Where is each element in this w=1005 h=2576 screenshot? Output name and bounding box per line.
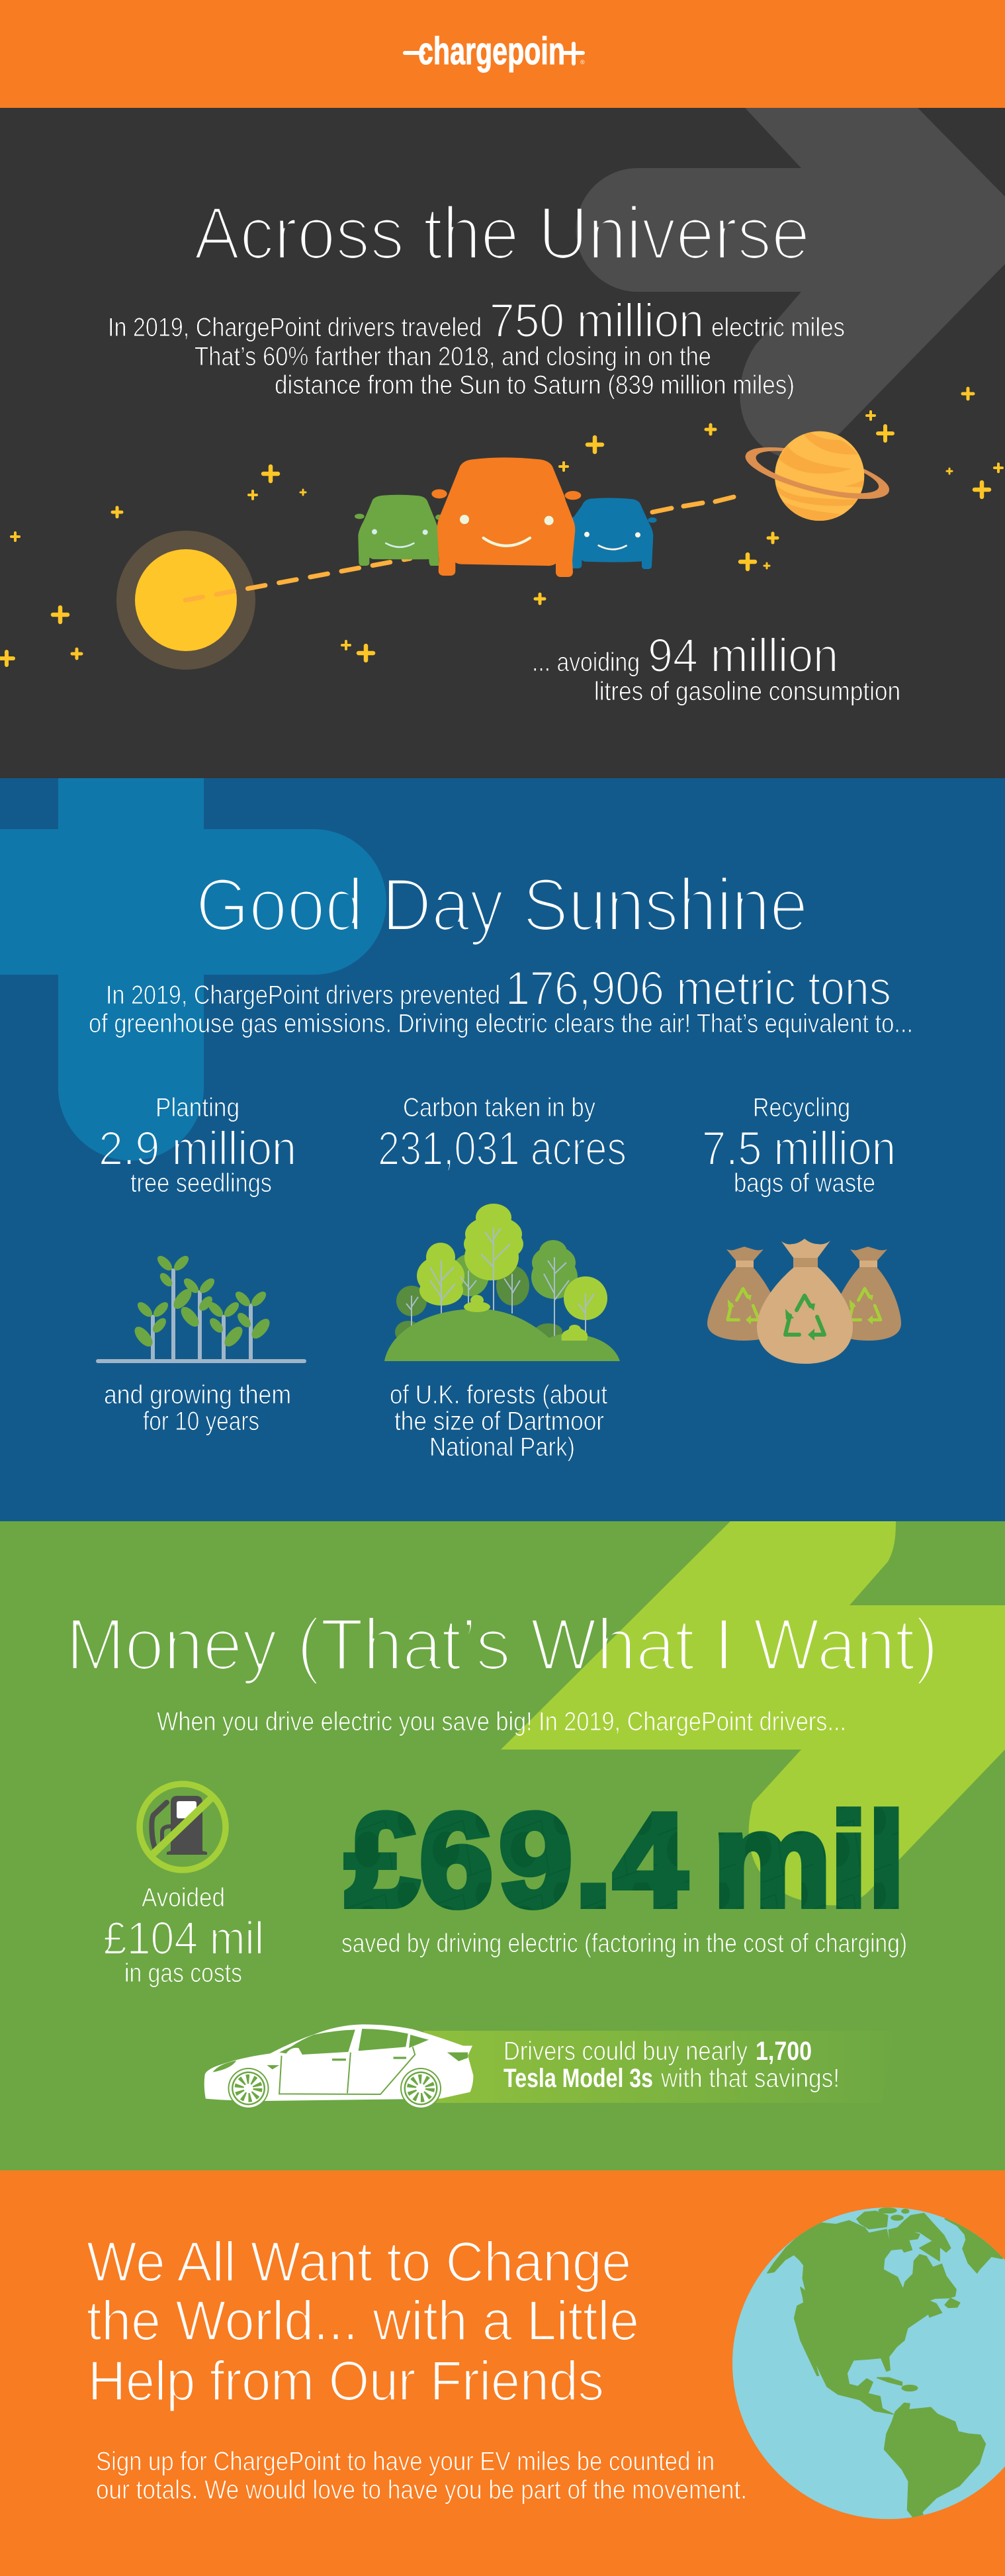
route dashes: [185, 497, 734, 600]
icon: forest: [384, 1204, 620, 1361]
heading: Help from Our Friends: [88, 2350, 604, 2412]
intro text: 750 million: [490, 295, 704, 347]
stat: avoided gas costs: in gas costs: [124, 1959, 242, 1988]
icon: sun: [116, 531, 255, 670]
panel: change the world: [0, 2170, 1005, 2576]
intro text: 176,906 metric tons: [505, 963, 891, 1015]
avoided gasoline text: 94 million: [648, 630, 838, 682]
avoided gasoline text: ... avoiding: [532, 648, 640, 677]
column: planting: for 10 years: [143, 1407, 259, 1436]
intro text: That’s 60% farther than 2018, and closing in on the: [195, 342, 711, 371]
intro text: When you drive electric you save big! In 2019, ChargePoint drivers...: [157, 1707, 846, 1736]
background lightning bolt: [501, 1521, 1005, 1905]
call to action text: [96, 2447, 747, 2505]
panel: across the universe: [0, 108, 1005, 705]
gradient banner: [423, 2031, 893, 2103]
stars: [0, 388, 1002, 665]
blue car: [571, 498, 657, 569]
column: planting: tree seedlings: [130, 1169, 272, 1198]
intro text: In 2019, ChargePoint drivers traveled: [108, 313, 482, 342]
icon: globe: [732, 2207, 1005, 2519]
panel: good day sunshine: [0, 778, 1005, 1521]
stat: avoided gas costs: £104 mil: [103, 1912, 264, 1964]
column: carbon: National Park): [429, 1433, 575, 1462]
icon: no gas pump: [140, 1784, 226, 1870]
column: planting: and growing them: [104, 1380, 291, 1409]
column: recycling: 7.5 million: [702, 1123, 896, 1175]
icon: saturn: [746, 431, 889, 521]
intro text: [108, 295, 845, 400]
section title: Across the Universe: [194, 192, 810, 275]
intro text: electric miles: [711, 313, 845, 342]
column: carbon: Carbon taken in by: [403, 1093, 595, 1122]
column: carbon: the size of Dartmoor: [394, 1407, 604, 1436]
icon: seedlings: [96, 1253, 306, 1363]
stat: saved: saved by driving electric (factoring in the cost of charging): [341, 1929, 907, 1958]
avoided gasoline text: litres of gasoline consumption: [594, 677, 900, 706]
icon: recycling bags: [707, 1239, 901, 1364]
stat: avoided gas costs: [103, 1883, 264, 1988]
intro text: In 2019, ChargePoint drivers prevented: [106, 981, 500, 1010]
green car: [355, 495, 443, 566]
call to action text: Sign up for ChargePoint to have your EV miles be counted in: [96, 2447, 715, 2476]
stat: saved: £69.4mil: [345, 1787, 905, 1934]
callout text: Drivers could buy nearly: [503, 2037, 748, 2066]
icon: smiling cars: [355, 457, 657, 577]
logo: chargepoint: chargepoin: [418, 30, 565, 73]
column: planting: 2.9 million: [99, 1123, 296, 1175]
section title: Money (That’s What I Want): [66, 1604, 938, 1685]
stat: avoided gas costs: Avoided: [142, 1883, 225, 1912]
panel: header: [0, 0, 1005, 108]
column: carbon: [378, 1093, 627, 1462]
column: planting: Planting: [155, 1093, 240, 1122]
background plus: [0, 778, 386, 1161]
callout text: [503, 2037, 840, 2093]
section title: Good Day Sunshine: [196, 864, 808, 946]
tesla callout: [204, 2024, 893, 2109]
orange car: [431, 457, 581, 577]
column: carbon: 231,031 acres: [378, 1123, 627, 1175]
callout text: 1,700: [756, 2037, 812, 2066]
heading: the World... with a Little: [87, 2289, 639, 2352]
icon: car: [204, 2024, 473, 2109]
background arrow: [576, 108, 1005, 460]
call to action text: our totals. We would love to have you be part of the movement.: [96, 2475, 747, 2505]
column: carbon: of U.K. forests (about: [390, 1380, 607, 1409]
column: recycling: [702, 1093, 901, 1364]
callout text: Tesla Model 3s: [503, 2064, 653, 2093]
column: recycling: bags of waste: [734, 1169, 875, 1198]
avoided gasoline text: [532, 630, 900, 706]
logo: chargepoint: ®: [580, 59, 585, 66]
intro text: [89, 963, 913, 1038]
column: recycling: Recycling: [753, 1093, 850, 1122]
column: planting: [96, 1093, 306, 1436]
callout text: with that savings!: [660, 2064, 840, 2093]
heading: We All Want to Change: [87, 2231, 631, 2293]
panel: money: [0, 1521, 1005, 2170]
heading: [87, 2231, 639, 2412]
intro text: distance from the Sun to Saturn (839 million miles): [275, 371, 795, 400]
